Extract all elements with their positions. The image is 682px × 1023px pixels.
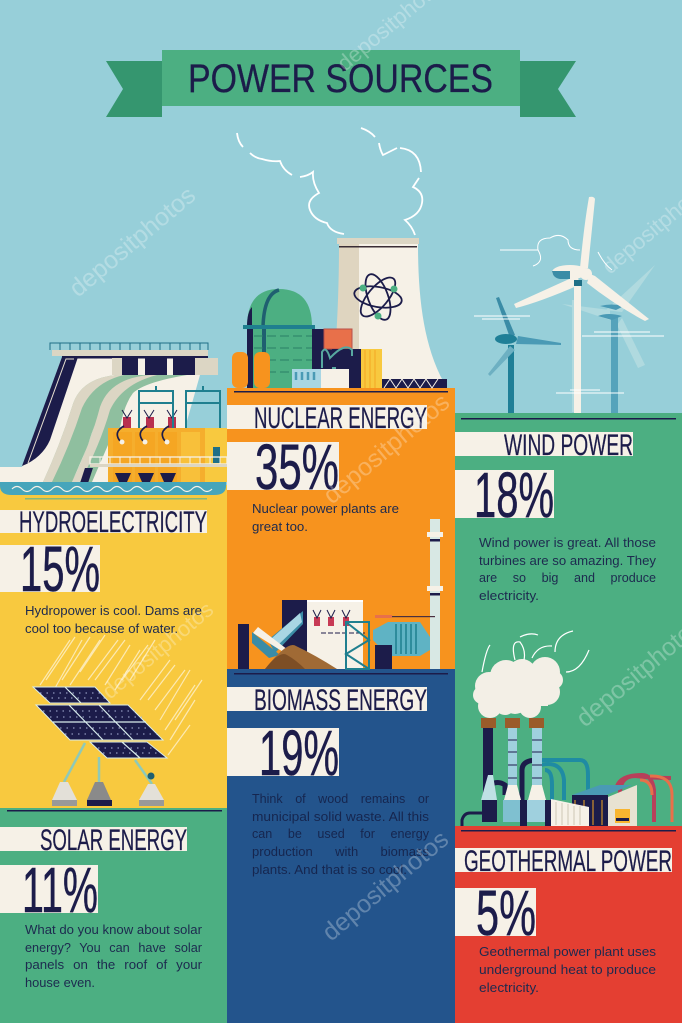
panel: nuclear energy: NUCLEAR ENERGY	[254, 402, 427, 435]
smoke outline: nuclear	[237, 128, 422, 235]
panel: biomass energy: production with biomass	[252, 845, 429, 859]
panel: wind power: turbines are so amazing. They	[479, 554, 657, 568]
panel: nuclear energy: Nuclear power plants are	[252, 502, 399, 516]
panel: geothermal power: 5%	[476, 877, 536, 949]
illustration: solar panel tracker	[33, 635, 202, 806]
panel: biomass energy: municipal solid waste. All this	[252, 810, 429, 824]
panel: biomass energy: BIOMASS ENERGY	[254, 684, 427, 717]
panel: hydroelectricity: cool too because of water.	[25, 622, 178, 636]
illustration: wind turbines	[474, 197, 664, 413]
panel: wind power: electricity.	[479, 589, 539, 603]
panel: solar energy	[0, 808, 227, 1023]
watermarks: depositphotos	[318, 388, 455, 510]
panel: biomass energy: 19%	[259, 717, 339, 789]
panel: hydroelectricity: HYDROELECTRICITY	[19, 506, 207, 539]
panel: solar energy: energy? You can have solar	[25, 941, 202, 955]
panel: nuclear energy	[227, 388, 455, 669]
watermarks: depositphotos	[317, 825, 454, 947]
panel: biomass energy: Think of wood remains or	[252, 792, 429, 806]
panel: geothermal power: electricity.	[479, 981, 539, 995]
panel: wind power	[455, 413, 682, 826]
panel: wind power: 18%	[474, 459, 554, 531]
panel: biomass energy: plants. And that is so cool.	[252, 863, 407, 877]
panel: solar energy: house even.	[25, 976, 95, 990]
title banner	[106, 50, 576, 117]
watermarks: depositphotos	[97, 597, 218, 704]
panel: nuclear energy: 35%	[255, 431, 339, 503]
panel: solar energy: What do you know about solar	[25, 923, 202, 937]
illustration: geothermal plant	[462, 631, 672, 826]
watermarks: depositphotos	[64, 181, 201, 303]
panel: geothermal power: underground heat to produce	[479, 963, 656, 977]
panel: hydroelectricity: Hydropower is cool. Dams are	[25, 604, 202, 618]
illustration: hydroelectric dam	[0, 343, 227, 495]
panel: biomass energy: can be used for energy	[252, 827, 430, 841]
illustration: biomass plant	[238, 519, 443, 669]
illustration: nuclear plant	[232, 238, 447, 388]
panel: hydroelectricity: 15%	[20, 533, 100, 605]
panel: hydroelectricity	[0, 485, 227, 808]
panel: solar energy: SOLAR ENERGY	[40, 824, 187, 857]
panel: solar energy: panels on the roof of your	[25, 958, 202, 972]
title banner: POWER SOURCES	[188, 57, 493, 101]
panel: biomass energy	[227, 669, 455, 1023]
panel: geothermal power	[455, 826, 682, 1023]
panel: solar energy: 11%	[22, 854, 98, 926]
panel: wind power: are so big and produce	[479, 571, 656, 585]
panel: geothermal power: Geothermal power plant uses	[479, 945, 656, 959]
panel: nuclear energy: great too.	[252, 520, 308, 534]
panel: wind power: Wind power is great. All those	[479, 536, 656, 550]
